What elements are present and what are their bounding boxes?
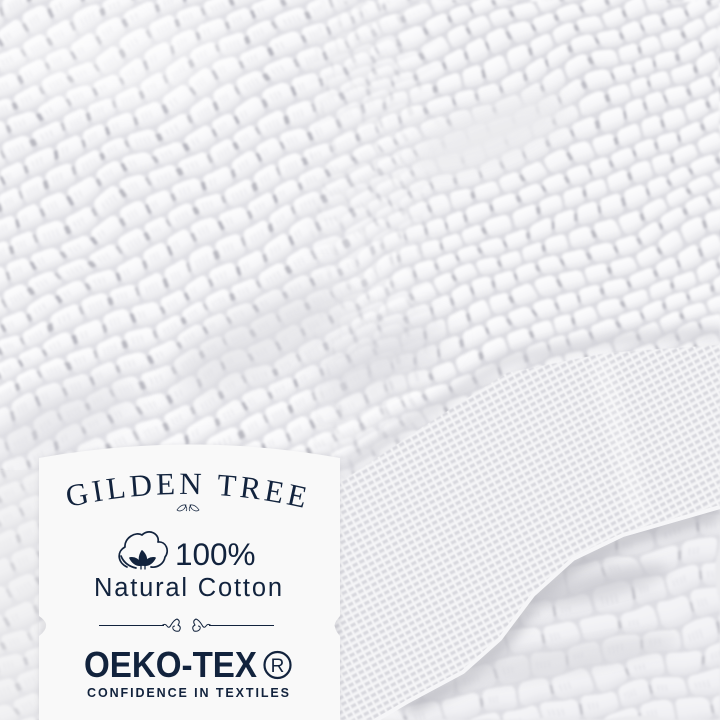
icon: cotton boll	[119, 532, 167, 569]
text: 100%: 100%	[175, 536, 256, 572]
text: Natural Cotton: Natural Cotton	[94, 574, 282, 602]
brand name: GILDEN TREE: GILDEN TREE	[67, 474, 306, 508]
divider with flourish	[99, 619, 274, 631]
logo: OEKO-TEX: OEKO-TEX	[84, 644, 257, 685]
icon: registered mark	[264, 652, 290, 678]
fabric: woven hem band	[300, 345, 720, 720]
fabric: lower right weave	[398, 506, 720, 720]
icon: leaf ornament	[177, 505, 199, 511]
icon: registered mark: R	[271, 656, 284, 677]
fabric: soft folds and shading	[0, 10, 720, 479]
tagline: CONFIDENCE IN TEXTILES: CONFIDENCE IN TEXTILES	[87, 686, 289, 700]
fabric: left side behind label	[0, 470, 39, 720]
label: white woven tag	[38, 444, 341, 720]
